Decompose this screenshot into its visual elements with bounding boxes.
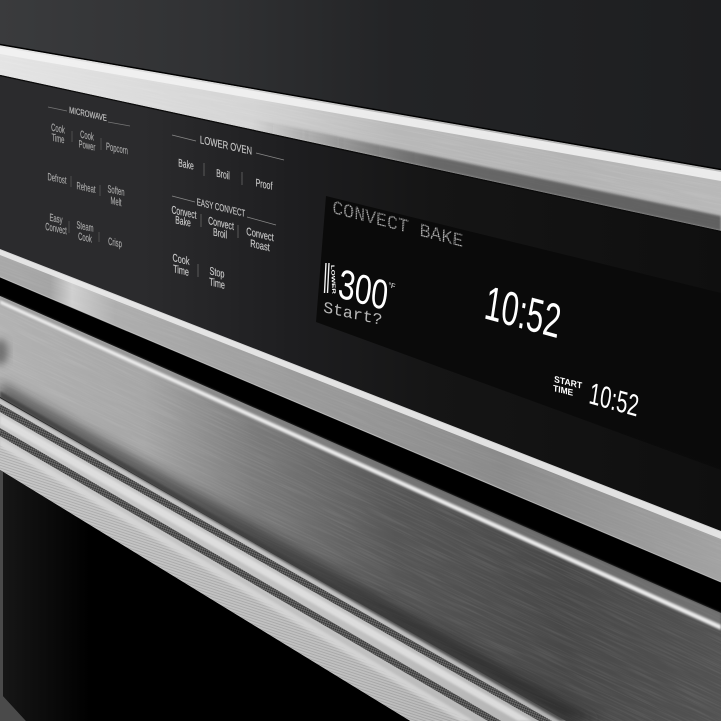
group: cook and stop time: Time (173, 262, 189, 278)
clock readout: 10:52 (481, 276, 564, 349)
temperature readout: 300: 300 (336, 260, 391, 319)
group: microwave controls: Power (79, 137, 95, 153)
oven door handle (0, 296, 721, 721)
group: lower oven controls: Proof (256, 177, 273, 192)
start time label: START (554, 374, 583, 391)
group: cook and stop time: Cook (173, 250, 190, 267)
control labels (45, 105, 284, 291)
lower stainless trim bar (0, 249, 721, 582)
group: microwave controls: Convect (45, 220, 67, 237)
display text: Convect Bake: CONVECT BAKE (332, 197, 464, 253)
group: microwave controls: Cook (78, 230, 92, 245)
group: lower oven controls: Bake (178, 157, 194, 172)
group: microwave controls: Cook (51, 121, 65, 136)
oven indicator: lower: LOWER (329, 265, 336, 295)
control panel background (0, 75, 721, 532)
group: microwave controls: Cook (80, 128, 94, 143)
start time label: TIME (553, 383, 573, 398)
group: easy convect controls: Convect (208, 215, 234, 232)
start time label (553, 374, 583, 398)
top stainless trim bar (0, 44, 721, 232)
group: microwave controls: Reheat (77, 179, 96, 196)
group: easy convect controls: EASY CONVECT (197, 196, 245, 219)
display window (316, 196, 721, 470)
group: easy convect controls: Convect (246, 226, 274, 245)
group: microwave controls: Defrost (48, 170, 67, 187)
group: cook and stop time (173, 250, 225, 291)
group: microwave controls: Popcorn (106, 140, 128, 157)
display readouts (323, 197, 641, 424)
group: lower oven controls: LOWER OVEN (200, 134, 252, 158)
group: microwave controls: Steam (77, 218, 93, 234)
group: easy convect controls: Broil (213, 226, 227, 241)
lower oven window (0, 470, 410, 721)
oven indicator: lower (324, 263, 336, 295)
group: microwave controls: MICROWAVE (69, 105, 107, 123)
group: easy convect controls: Convect (172, 204, 197, 221)
group: microwave controls: Melt (110, 194, 122, 209)
upper oven dark glass (0, 0, 721, 170)
group: cook and stop time: Stop (210, 264, 224, 280)
group: microwave controls (45, 105, 130, 250)
group: microwave controls: Easy (49, 211, 63, 226)
group: easy convect controls: Bake (175, 214, 191, 229)
group: microwave controls: Time (52, 131, 65, 146)
display text: Start?: Start? (323, 299, 383, 330)
group: microwave controls: Crisp (108, 235, 122, 250)
group: easy convect controls: Roast (250, 237, 270, 255)
start time readout: 10:52 (587, 376, 641, 424)
temperature unit: °F (388, 281, 396, 291)
handle ribbed grip (0, 391, 572, 721)
group: cook and stop time: Time (209, 275, 225, 291)
group: easy convect controls (172, 196, 276, 255)
group: lower oven controls (172, 134, 284, 192)
group: lower oven controls: Broil (216, 167, 230, 182)
group: microwave controls: Soften (108, 182, 125, 198)
